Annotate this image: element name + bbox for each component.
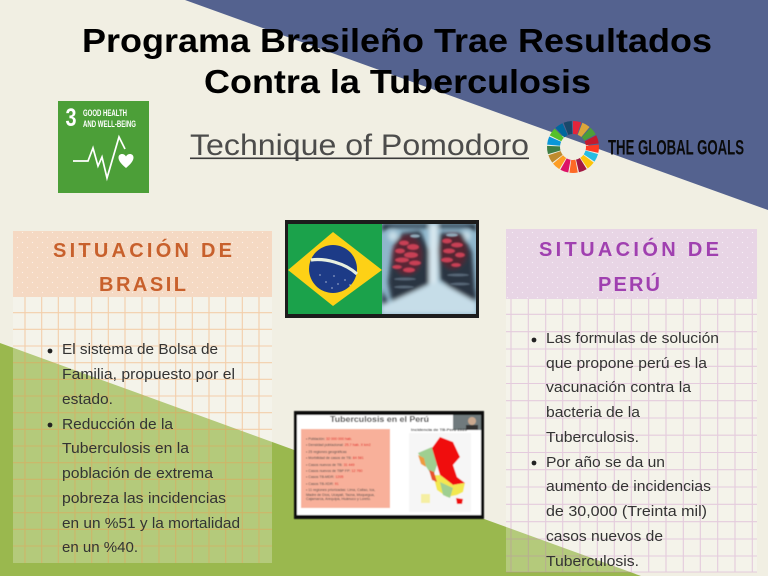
text block: Perú bullets: de 30,000 (Treinta mil) bbox=[546, 503, 707, 520]
slide data box: • Casos TB-MDR: 1205 bbox=[306, 475, 343, 479]
icon: SDG 3 good health and well-being: GOOD HEALTH bbox=[83, 108, 127, 119]
panel heading: Perú: SITUACIÓN DE bbox=[539, 237, 719, 261]
panel body: Brasil grid bbox=[13, 297, 272, 563]
slide data box: • Población: 32 000 000 hab. bbox=[306, 437, 352, 441]
background shape: blue triangle bbox=[185, 0, 768, 210]
background shape: green triangle bbox=[0, 343, 641, 576]
title: Programa Brasileño Trae Resultados bbox=[82, 22, 712, 59]
slide title: Tuberculosis en el Perú bbox=[330, 415, 429, 424]
text block: Perú bullets bbox=[532, 330, 719, 570]
text block: Perú bullets: Tuberculosis. bbox=[546, 429, 639, 446]
text block: Brasil bullets: Reducción de la bbox=[62, 416, 174, 433]
icon: SDG 3 good health and well-being: AND WELL-BEING bbox=[83, 119, 136, 130]
text block: Brasil bullets: población de extrema bbox=[62, 465, 214, 482]
text block: Brasil bullets: Tuberculosis en la bbox=[62, 440, 190, 457]
slide data box: • 11 regiones priorizadas: Lima, Callao, Ica, bbox=[306, 488, 375, 492]
text block: Perú bullets: aumento de incidencias bbox=[546, 478, 711, 495]
panel heading: Perú bbox=[506, 229, 757, 299]
text block: Brasil bullets: Familia, propuesto por el bbox=[62, 366, 235, 383]
slide data box bbox=[301, 429, 390, 508]
title bbox=[82, 22, 712, 100]
panel body: Perú grid bbox=[506, 299, 757, 572]
slide data box: • 25 regiones geográficas bbox=[306, 450, 347, 454]
slide map of Peru: Incidencia de TB-Perú 2020 bbox=[411, 428, 467, 432]
image: Brazil flag and chest x-ray bbox=[285, 220, 479, 318]
text block: Perú bullets: Por año se da un bbox=[546, 454, 665, 471]
panel heading: Brasil bbox=[13, 231, 272, 297]
slide map of Peru bbox=[409, 428, 471, 512]
text block: Brasil bullets: pobreza las incidencias bbox=[62, 490, 226, 507]
slide data box: • Morbilidad de casos de TB: 84 581 bbox=[306, 456, 364, 460]
icon: SDG 3 good health and well-being: 3 bbox=[66, 104, 76, 132]
text block: Perú bullets: casos nuevos de bbox=[546, 528, 663, 545]
panel heading: Perú: PERÚ bbox=[598, 272, 660, 296]
text block: Perú bullets: que propone perú es la bbox=[546, 355, 708, 372]
slide data box: Cajamarca, Arequipa, Huánuco y Loreto. bbox=[306, 497, 371, 501]
icon: global goals ring bbox=[545, 119, 601, 175]
text block: Brasil bullets: en un %51 y la mortalidad bbox=[62, 515, 240, 532]
slide data box: • Densidad poblacional: 25.7 hab. X km2 bbox=[306, 443, 371, 447]
slide data box: • Casos nuevos de TBP FP: 12 760 bbox=[306, 469, 362, 473]
text block: Perú bullets: Tuberculosis. bbox=[546, 553, 639, 570]
text block: Brasil bullets bbox=[48, 341, 240, 556]
slide webcam thumbnail bbox=[453, 415, 481, 430]
slide data box: Madre de Dios, Ucayali, Tacna, Moquegua, bbox=[306, 493, 375, 497]
slide data box: • Casos TB-XDR: 91 bbox=[306, 482, 339, 486]
panel heading: Brasil: BRASIL bbox=[99, 274, 186, 296]
text block: Brasil bullets: El sistema de Bolsa de bbox=[62, 341, 218, 358]
subtitle: Technique of Pomodoro: Technique of Pomodoro bbox=[190, 129, 529, 162]
slide data box: • Casos nuevos de TB: 31 449 bbox=[306, 463, 355, 467]
panel: situación de Perú bbox=[506, 229, 757, 572]
image: chest x-ray bbox=[382, 224, 476, 314]
icon: SDG 3 good health and well-being bbox=[58, 101, 149, 193]
text block: Brasil bullets: estado. bbox=[62, 391, 113, 408]
text block: Perú bullets: bacteria de la bbox=[546, 404, 641, 421]
title: Contra la Tuberculosis bbox=[204, 63, 591, 100]
text block: Brasil bullets: en un %40. bbox=[62, 539, 138, 556]
panel: situación de Brasil bbox=[13, 231, 272, 563]
text block: Perú bullets: vacunación contra la bbox=[546, 379, 692, 396]
icon: Brazil flag bbox=[288, 224, 382, 314]
panel heading: Brasil: SITUACIÓN DE bbox=[53, 238, 232, 262]
text block: Perú bullets: Las formulas de solución bbox=[546, 330, 719, 347]
image: slide about tuberculosis in Peru bbox=[294, 411, 484, 519]
